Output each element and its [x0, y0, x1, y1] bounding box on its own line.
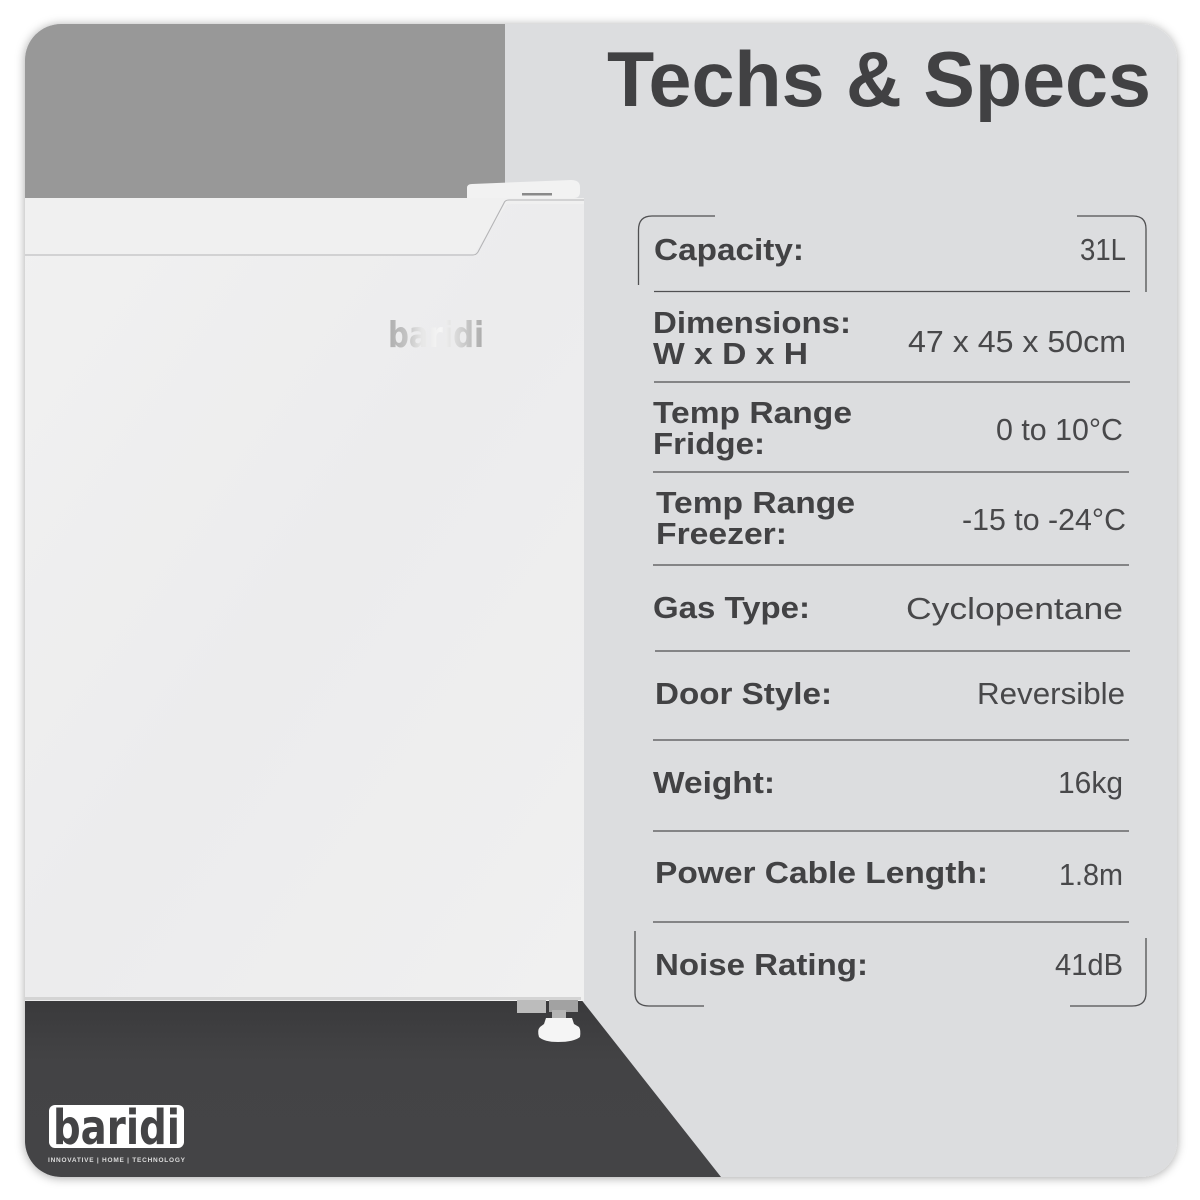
row: temp range freezer: -15 to -24°C	[962, 502, 1126, 537]
top bracket left	[638, 216, 715, 285]
row: door style	[655, 676, 1125, 711]
logo wordmark: baridi	[53, 1100, 180, 1156]
row: dimensions	[653, 305, 1126, 371]
bottom bracket left	[635, 931, 704, 1006]
row: temp range freezer: Freezer:	[656, 516, 787, 551]
row: dimensions: Dimensions:	[653, 305, 851, 340]
fridge adjustable foot	[517, 1000, 580, 1042]
row: gas type: Cyclopentane	[906, 591, 1123, 626]
row: temp range freezer: Temp Range	[656, 485, 855, 520]
brand logo	[48, 1100, 186, 1164]
backdrop and product photo	[25, 24, 721, 1177]
row: dimensions: 47 x 45 x 50cm	[908, 324, 1126, 359]
row: weight: 16kg	[1058, 765, 1123, 800]
row: gas type: Gas Type:	[653, 590, 810, 625]
grey wall panel	[25, 24, 505, 199]
row: noise rating: 41dB	[1055, 947, 1123, 982]
row: noise rating	[655, 947, 1123, 982]
row: temp range fridge: Fridge:	[653, 426, 765, 461]
fridge hinge	[467, 180, 580, 198]
row: temp range fridge: 0 to 10°C	[996, 412, 1123, 447]
row: power cable length: 1.8m	[1059, 857, 1123, 892]
fridge door logo: baridi	[388, 315, 484, 356]
row: temp range fridge	[653, 395, 1123, 461]
dark floor	[25, 998, 721, 1177]
row: power cable length: Power Cable Length:	[655, 855, 988, 890]
row: dimensions: W x D x H	[653, 336, 808, 371]
row: door style: Reversible	[977, 676, 1125, 711]
row: noise rating: Noise Rating:	[655, 947, 868, 982]
row: temp range freezer	[656, 485, 1126, 551]
specification table	[635, 216, 1146, 1006]
fridge door	[25, 198, 584, 1001]
bottom bracket right	[1070, 938, 1146, 1006]
row: capacity: 31L	[1080, 232, 1126, 267]
row: power cable length	[655, 855, 1123, 892]
row: capacity: Capacity:	[654, 232, 804, 267]
row: door style: Door Style:	[655, 676, 832, 711]
row: weight: Weight:	[653, 765, 775, 800]
logo badge	[49, 1105, 184, 1148]
row: weight	[653, 765, 1123, 800]
row: capacity	[654, 232, 1126, 267]
logo tagline: INNOVATIVE | HOME | TECHNOLOGY	[48, 1157, 186, 1164]
top bracket right	[1077, 216, 1146, 292]
row: temp range fridge: Temp Range	[653, 395, 852, 430]
title: Techs & Specs	[607, 35, 1151, 123]
row: gas type	[653, 590, 1123, 626]
